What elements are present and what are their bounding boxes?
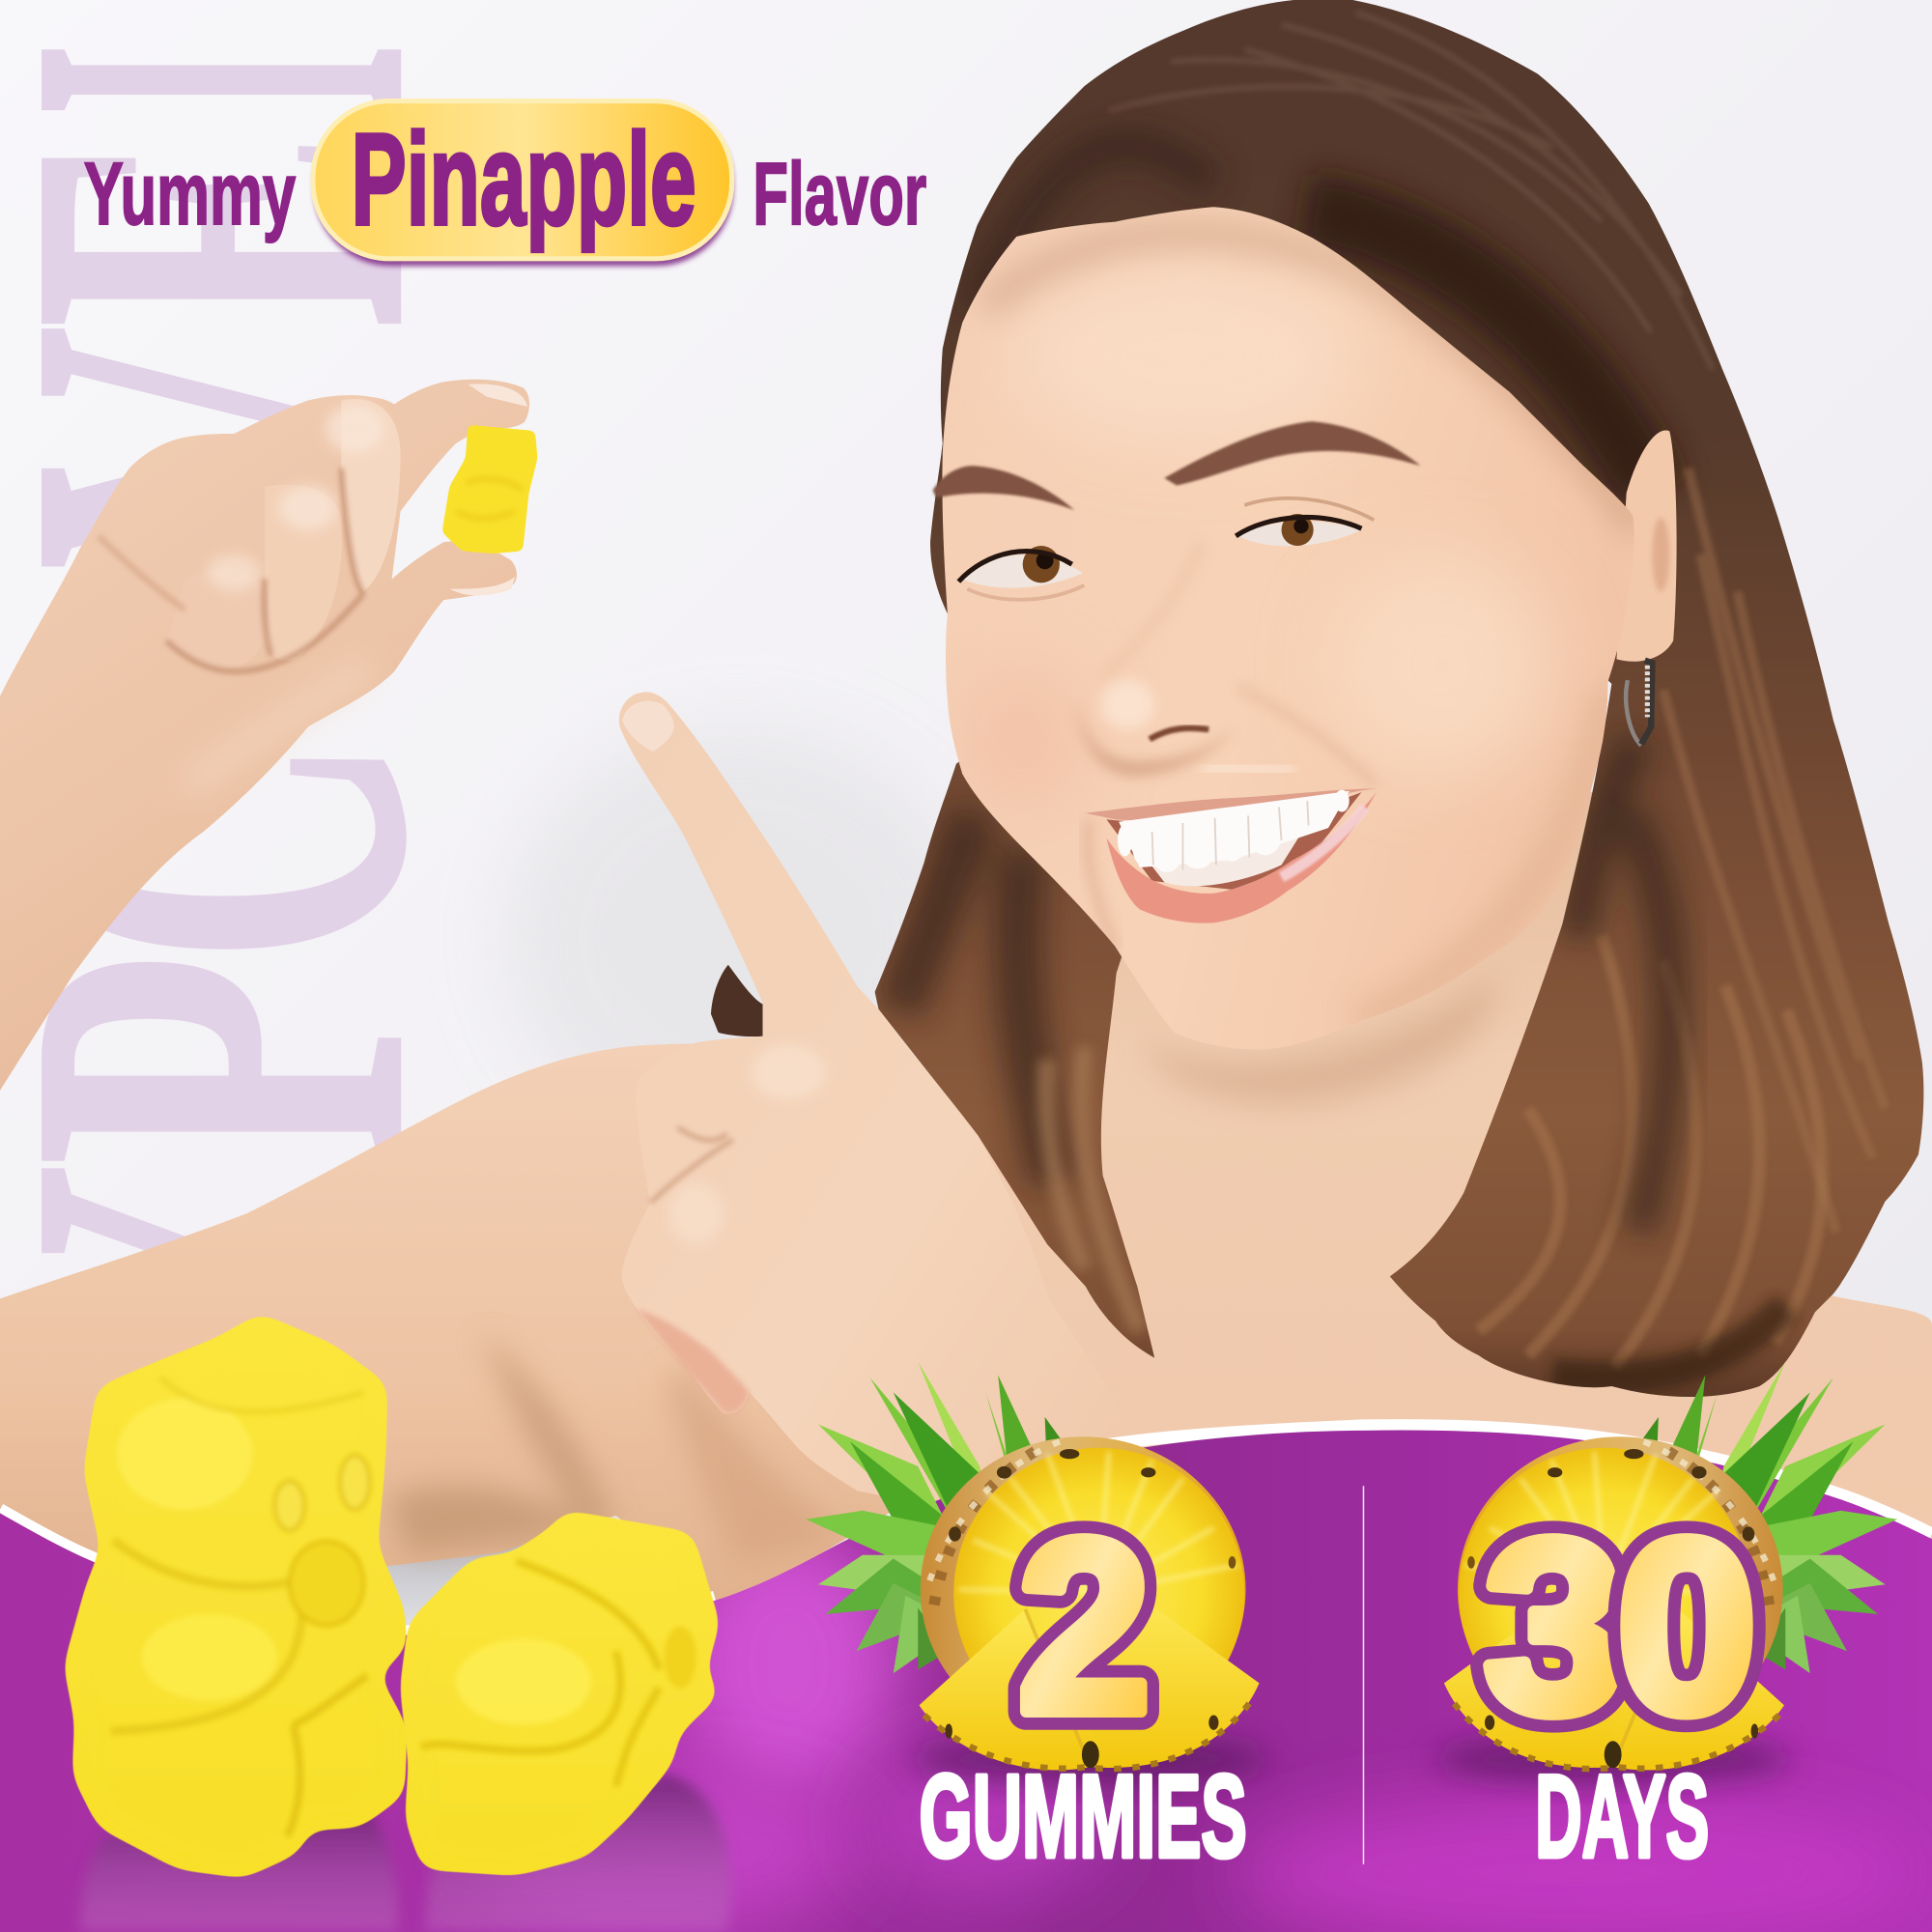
number 3 outline: 3	[1484, 1490, 1624, 1765]
bear body	[64, 1314, 407, 1878]
pill shadow	[314, 106, 733, 267]
number 3 fill: 3	[1484, 1490, 1624, 1765]
pineapple slice	[1444, 1361, 1897, 1770]
word flavor: Flavor	[753, 145, 926, 243]
nose	[1076, 680, 1234, 777]
face	[933, 207, 1638, 1050]
word pinapple: Pinapple	[352, 106, 696, 252]
hair	[0, 0, 1932, 1430]
wisp behind finger	[711, 965, 763, 1037]
right eyebrow	[1164, 421, 1421, 486]
watermark lettering	[0, 43, 518, 1430]
curled fingers	[99, 384, 527, 788]
fingernails	[469, 384, 527, 407]
purple wave panel	[0, 1316, 1932, 1932]
bear body	[401, 1511, 720, 1875]
fingernail	[622, 701, 674, 752]
lower lip	[1106, 792, 1377, 923]
label gummies: GUMMIES	[920, 1750, 1247, 1882]
number 2 fill: 2	[1018, 1490, 1151, 1765]
pill	[313, 101, 732, 259]
gummy reflection shadows	[80, 1775, 731, 1932]
left eye	[958, 546, 1084, 600]
ear	[1616, 430, 1677, 662]
number 0 outline: 0	[1616, 1490, 1757, 1765]
earring	[1626, 661, 1652, 746]
pointing hand	[619, 692, 1142, 1516]
right eye	[1236, 498, 1374, 546]
tooth separators	[1152, 801, 1309, 870]
gummy bear: large standing	[64, 1314, 407, 1878]
stat: 2 gummies	[806, 1361, 1269, 1882]
smile	[1086, 788, 1377, 923]
raised hand	[0, 380, 529, 1091]
divider	[1363, 1486, 1364, 1864]
label days: DAYS	[1535, 1750, 1709, 1882]
neck shadow	[1140, 974, 1497, 1103]
upper lip	[1086, 788, 1377, 820]
tucked finger	[637, 1309, 750, 1414]
arm and pointing hand	[0, 692, 1142, 1601]
flavor headline	[84, 101, 926, 267]
chest and shoulder	[936, 788, 1932, 1565]
armpit shading	[388, 1333, 616, 1555]
stat: 30 days	[1435, 1361, 1897, 1882]
small gummy bear	[442, 425, 537, 554]
number 2 outline: 2	[1018, 1490, 1151, 1765]
upper teeth	[1118, 790, 1350, 872]
bear shading	[421, 1561, 696, 1786]
upper arm	[0, 1044, 1109, 1601]
word yummy: Yummy	[84, 145, 296, 243]
under-arm gap	[370, 1521, 579, 1645]
number 0 fill: 0	[1616, 1490, 1757, 1765]
knuckle creases	[650, 1127, 733, 1203]
left eyebrow	[933, 466, 1074, 510]
lower teeth	[1140, 826, 1306, 886]
gummy bear: side view	[401, 1511, 720, 1875]
pineapple shadow	[912, 1735, 1269, 1784]
pineapple shadow	[1435, 1735, 1792, 1784]
pineapple slice	[806, 1361, 1260, 1770]
bear shading	[111, 1378, 370, 1836]
